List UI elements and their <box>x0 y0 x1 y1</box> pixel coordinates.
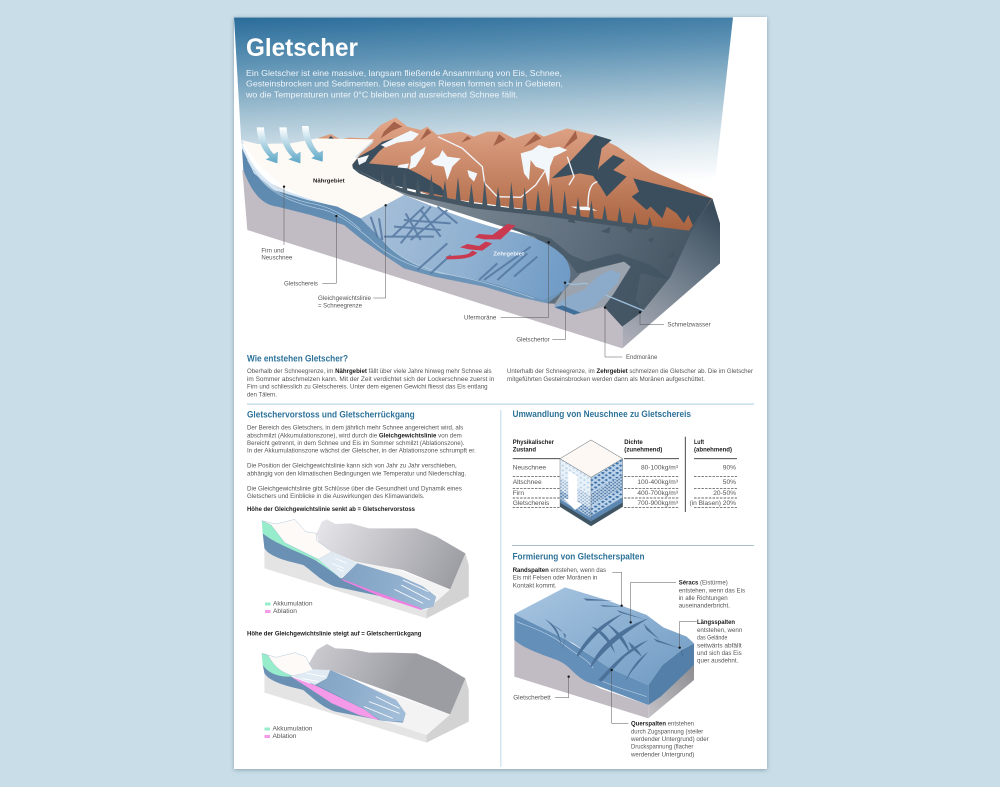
table headers: Luft <box>694 439 705 446</box>
firn layer <box>241 140 361 220</box>
table row labels <box>513 464 550 507</box>
panel: page card <box>234 17 767 769</box>
text column right: mitgeführten Gesteinsbrocken werden dann als Moränen aufgeschüttet. <box>507 376 705 383</box>
intro text <box>245 68 563 99</box>
text: Längsspalten: seitwärts abfällt <box>697 642 742 649</box>
mountain range <box>317 117 712 232</box>
text: Querspalten: Querspalten entstehen <box>631 721 694 728</box>
heading: Wie entstehen Gletscher? <box>247 354 348 364</box>
table headers: Physikalischer <box>513 439 554 446</box>
text: Séracs: entstehen, wenn das Eis <box>679 587 745 594</box>
text block <box>247 425 476 500</box>
text block: Der Bereich des Gletschers, in dem jährlich mehr Schnee angereichert wird, als <box>247 425 463 432</box>
table air values <box>689 464 736 507</box>
sky background <box>234 17 733 202</box>
callout: Gletschertor <box>516 281 566 343</box>
text block: Die Gleichgewichtslinie gibt Schlüsse über die Gesundheit und Dynamik eines <box>247 485 462 492</box>
text block: abschmilzt (Akkumulationszone), wird durch die Gleichgewichtslinie von dem <box>247 432 462 439</box>
text: Längsspalten: entstehen, wenn <box>697 627 743 634</box>
callout: Schmelzwasser <box>639 311 711 329</box>
callout: Ufermoräne <box>464 241 550 321</box>
table headers: (zunehmend) <box>624 446 662 453</box>
legend: retreat: Akkumulation <box>272 725 313 732</box>
icon: snowfall arrows <box>257 126 323 163</box>
callout: Gleichgewichtslinie: = Schneegrenze <box>318 303 362 310</box>
heading: Formierung von Gletscherspalten <box>512 551 644 561</box>
callout: Gletschereis: Gletschereis <box>284 280 318 287</box>
callout: Firn und Neuschnee: Firn und <box>261 247 284 254</box>
icon: red ice-flow arrows <box>446 224 516 259</box>
subheading retreat: Höhe der Gleichgewichtslinie steigt auf = Gletscherrückgang <box>247 630 422 637</box>
callout: Firn und Neuschnee <box>261 185 293 262</box>
text: Längsspalten <box>697 619 743 664</box>
valley floor <box>351 167 720 327</box>
label: Zehrgebiet: Zehrgebiet <box>493 252 524 258</box>
text: Randspalten <box>513 567 606 589</box>
table density values: 80-100kg/m³ <box>641 464 679 471</box>
section: Gletschervorstoss und Gletscherrückgang <box>247 410 476 743</box>
callout: Querspalten leader <box>610 669 628 723</box>
mountain shadows <box>327 135 712 227</box>
section: Formierung von Gletscherspalten <box>512 551 745 758</box>
table headers: Zustand <box>513 446 536 453</box>
table row labels: Firn <box>513 490 524 497</box>
section: Wie entstehen Gletscher <box>247 354 754 398</box>
callout: Schmelzwasser: Schmelzwasser <box>667 322 711 329</box>
right side face <box>622 198 720 348</box>
callout: Séracs leader <box>629 582 676 623</box>
table air values: (in Blasen) 20% <box>689 500 736 507</box>
table density values: 700-900kg/m³ <box>637 500 679 507</box>
table air values: 20-50% <box>713 490 736 497</box>
snow patches <box>357 131 597 211</box>
callout: Längsspalten leader <box>678 621 697 649</box>
section: Umwandlung von Neuschnee zu Gletschereis <box>512 409 737 526</box>
intro text: wo die Temperaturen unter 0°C bleiben und ausreichend Schnee fällt. <box>245 89 518 99</box>
tree-line shadow <box>381 170 676 258</box>
table row labels: Gletschereis <box>513 500 550 507</box>
subheading advance: Höhe der Gleichgewichtslinie senkt ab = Gletschervorstoss <box>247 506 415 513</box>
ice flow lines <box>247 160 534 298</box>
bedrock front face <box>242 170 622 348</box>
text: Randspalten: Eis mit Felsen oder Moränen in <box>513 575 598 582</box>
text: Querspalten: durch Zugspannung (steiler <box>631 728 704 735</box>
intro text: Gesteinsbrocken und Sedimenten. Diese eisigen Riesen formen sich in Gebieten, <box>246 79 563 89</box>
text block: abhängig von den klimatischen Bedingungen wie Temperatur und Niederschlag. <box>247 470 466 477</box>
callout: Ufermoräne: Ufermoräne <box>464 314 497 321</box>
legend: advance: Akkumulation <box>273 600 313 607</box>
text block: Bereicht getrennt, in dem Schnee und Eis im Sommer schmilzt (Ablationszone). <box>247 440 465 447</box>
diagram: glacier retreat <box>262 644 469 743</box>
table density values <box>637 464 679 507</box>
crevasse block diagram <box>514 572 697 723</box>
legend: advance: Ablation <box>273 608 297 615</box>
callout: Gleichgewichtslinie <box>318 204 387 310</box>
text: Querspalten <box>630 721 710 758</box>
text: Querspalten: werdender Untergrund) oder <box>630 736 710 743</box>
callout: Gletschertor: Gletschertor <box>516 336 550 343</box>
lobe edge <box>555 305 581 315</box>
table headers: Dichte <box>624 439 643 446</box>
moraine lobe <box>554 262 631 315</box>
peak facets <box>381 122 577 150</box>
callout: Gletscherbett leader <box>555 675 570 698</box>
table row labels: Altschnee <box>513 479 542 486</box>
text: Randspalten: Kontakt kommt. <box>513 582 557 589</box>
text: Querspalten: werdender Untergrund) <box>630 751 694 758</box>
panel: hero illustration <box>234 17 733 361</box>
legend: advance <box>265 600 313 615</box>
text block: Die Position der Gleichgewichtslinie kann sich von Jahr zu Jahr verschieben, <box>247 463 457 470</box>
label: Nährgebiet: Nährgebiet <box>313 179 345 185</box>
title: Gletscher <box>246 34 358 62</box>
legend: retreat <box>264 725 313 740</box>
text: Längsspalten: und sich das Eis <box>697 650 742 657</box>
text: Séracs: in alle Richtungen <box>679 595 728 602</box>
heading: Gletschervorstoss und Gletscherrückgang <box>247 410 415 420</box>
callout: Endmoräne <box>604 306 658 361</box>
callout: Gleichgewichtslinie: Gleichgewichtslinie <box>318 295 371 302</box>
diagram: glacier advance <box>262 519 469 618</box>
callout: Gletschereis <box>284 215 337 287</box>
table air values: 50% <box>723 479 736 486</box>
table density values: 100-400kg/m³ <box>637 479 679 486</box>
text: Séracs: auseinanderbricht. <box>679 603 730 610</box>
text column left <box>247 368 495 398</box>
text block: In der Akkumulationszone wächst der Gletscher, in der Ablationszone schrumpft er. <box>247 448 476 455</box>
snow field Nährgebiet <box>241 138 405 218</box>
callout: Endmoräne: Endmoräne <box>626 354 658 361</box>
table headers <box>513 439 732 453</box>
text column right: Unterhalb der Schneegrenze, im Zehrgebiet schmelzen die Gletscher ab. Die im Gletscher <box>507 368 754 375</box>
table headers: (abnehmend) <box>694 446 732 453</box>
intro text: Ein Gletscher ist eine massive, langsam fließende Ansammlung von Eis, Schnee, <box>246 68 562 78</box>
text column left: Firn und schliesslich zu Gletschereis. Unter dem eigenen Gewicht fliesst das Eis entlang <box>247 384 488 391</box>
text block: Gletschers und Einblicke in die Auswirkungen des Klimawandels. <box>247 493 425 500</box>
text column left: den Tälern. <box>247 391 277 398</box>
text: Séracs: Séracs (Eistürme) <box>679 579 728 586</box>
snow streaks <box>438 137 597 207</box>
glacier side section <box>242 148 561 303</box>
table row labels: Neuschnee <box>513 464 546 471</box>
meltwater streams <box>567 283 643 311</box>
icon: layered snow cube <box>560 440 623 526</box>
text column right <box>507 368 754 383</box>
glacier surface Zehrgebiet <box>361 195 570 300</box>
text column left: im Sommer abschmelzen kann. Mit der Zeit verdichtet sich der Lockerschnee zuerst in <box>247 376 495 383</box>
callout: Firn und Neuschnee: Neuschnee <box>261 255 293 262</box>
text: Randspalten: Randspalten entstehen, wenn das <box>513 567 606 574</box>
text: Längsspalten: das Gelände <box>697 635 728 642</box>
heading: Umwandlung von Neuschnee zu Gletschereis <box>512 409 691 419</box>
table density values: 400-700kg/m³ <box>637 490 679 497</box>
callout: Randspalten leader <box>612 572 623 607</box>
proglacial ice lobe <box>554 270 621 314</box>
table air values: 90% <box>723 464 736 471</box>
text column left: Oberhalb der Schneegrenze, im Nährgebiet fällt über viele Jahre hinweg mehr Schnee als <box>247 368 492 375</box>
text: Gletscherbett: Gletscherbett <box>513 694 551 701</box>
legend: retreat: Ablation <box>272 733 297 740</box>
text: Längsspalten: Längsspalten <box>697 619 735 626</box>
valley dark moraine ridge <box>501 223 671 327</box>
text: Längsspalten: quer ausdehnt. <box>697 657 739 664</box>
text: Querspalten: Druckspannung (flacher <box>631 744 694 751</box>
text: Séracs <box>679 579 745 610</box>
table rules <box>513 437 737 512</box>
crevasses <box>371 207 537 280</box>
